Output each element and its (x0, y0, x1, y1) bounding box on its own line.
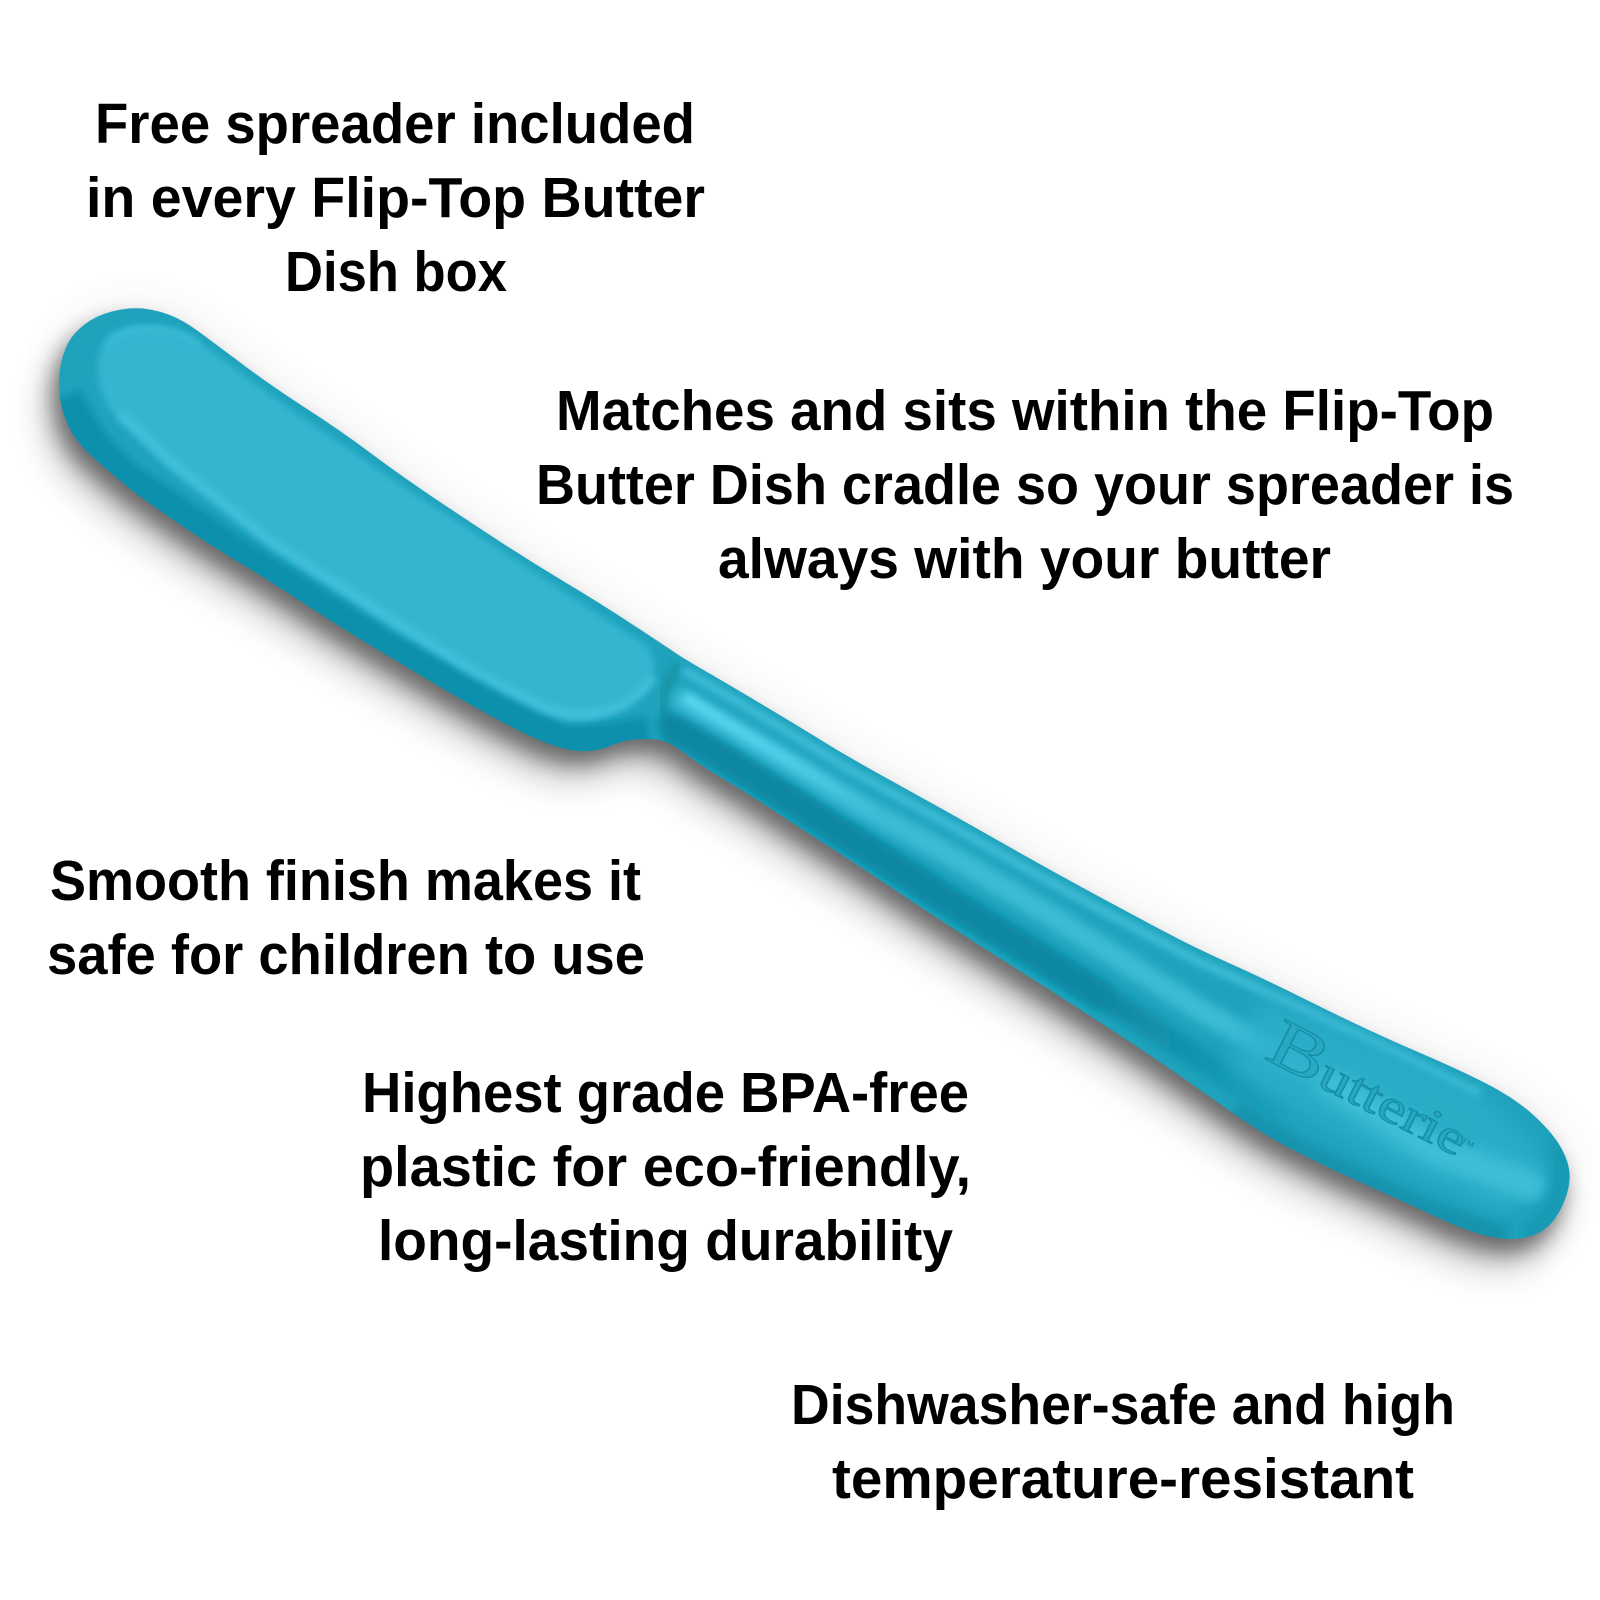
handle lower dark band (676, 747, 1244, 1092)
embossed logo: ™ (1456, 1134, 1477, 1156)
text: free spreader: Dish box (285, 240, 507, 304)
handle top light band (683, 670, 1480, 1094)
text: dishwasher-safe: temperature-resistant (832, 1447, 1414, 1511)
tip end rim (1525, 1140, 1563, 1238)
text: matches cradle: Matches and sits within the Flip-Top (556, 379, 1494, 443)
tip centre light (1333, 1085, 1530, 1185)
blade top-left highlight (105, 328, 200, 345)
text: smooth finish: safe for children to use (47, 923, 645, 987)
tip lower edge (1233, 1113, 1506, 1239)
spreader cast shadow (47, 308, 1570, 1267)
text: smooth finish: Smooth finish makes it (50, 849, 641, 913)
spreader body (59, 308, 1570, 1239)
handle centre light band (670, 688, 1262, 1048)
neck bright highlight (682, 692, 842, 792)
blade neck fold (663, 664, 677, 745)
text: BPA-free (360, 1061, 971, 1273)
embossed logo: Butterie (1256, 1004, 1485, 1170)
text: matches cradle: Butter Dish cradle so your spreader is (536, 453, 1514, 517)
text: smooth finish (47, 849, 645, 987)
text: BPA-free: plastic for eco-friendly, (360, 1135, 971, 1199)
text: free spreader (86, 92, 705, 304)
text: dishwasher-safe (791, 1373, 1455, 1511)
illustration: teal butter spreader (47, 308, 1570, 1267)
text: free spreader: Free spreader included (95, 92, 695, 156)
text: dishwasher-safe: Dishwasher-safe and high (791, 1373, 1455, 1437)
blade ridge highlight (120, 413, 653, 714)
text: BPA-free: long-lasting durability (378, 1209, 953, 1273)
tip face (1240, 1014, 1532, 1201)
blade face (98, 325, 654, 720)
blade lower band (60, 398, 650, 748)
text: BPA-free: Highest grade BPA-free (362, 1061, 969, 1125)
text: matches cradle: always with your butter (718, 527, 1331, 591)
text: matches cradle (536, 379, 1514, 591)
text: free spreader: in every Flip-Top Butter (86, 166, 705, 230)
